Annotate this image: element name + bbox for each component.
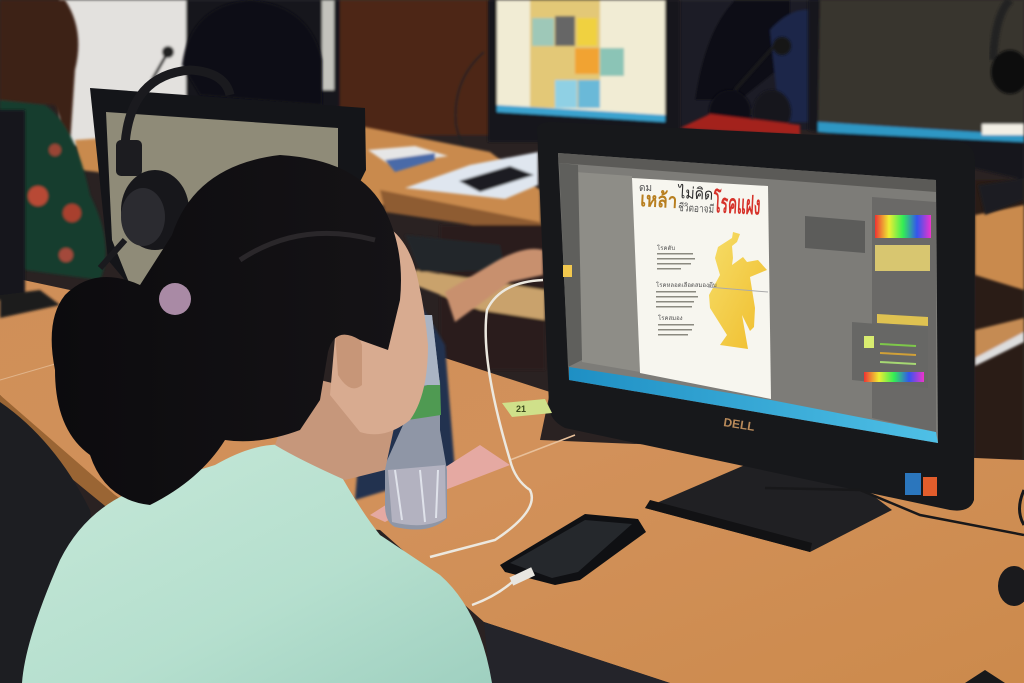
rear person center bbox=[182, 0, 543, 500]
main monitor bbox=[537, 122, 975, 552]
monitor stand bbox=[645, 465, 892, 552]
cables bbox=[430, 280, 1024, 605]
sticker bbox=[923, 477, 937, 496]
rear person left bbox=[0, 0, 106, 280]
pink notebook bbox=[370, 445, 510, 522]
monitor bezel bbox=[537, 122, 975, 511]
main person bbox=[22, 155, 492, 683]
table number tag: 21 bbox=[516, 404, 526, 414]
front desk bbox=[0, 275, 1024, 683]
smartphone bbox=[500, 514, 646, 586]
corner object bottom right bbox=[965, 670, 1005, 683]
rear desks bbox=[75, 125, 1024, 370]
screen: ชีวิตอาจมี bbox=[678, 201, 714, 216]
poster body text: โรคตับ bbox=[657, 244, 675, 252]
face bbox=[330, 225, 428, 434]
poster body text: โรคหลอดเลือดสมองตีบ bbox=[656, 281, 717, 289]
dell logo: DELL bbox=[723, 415, 756, 434]
flyaway hair highlight bbox=[240, 233, 375, 260]
poster body text: โรคสมอง bbox=[658, 314, 683, 322]
screen: เหล้า bbox=[640, 188, 678, 213]
ear bbox=[335, 329, 362, 388]
neck bbox=[275, 375, 400, 480]
screen: ดม bbox=[639, 183, 652, 194]
bear silhouette bbox=[709, 232, 767, 349]
rear monitor center top bbox=[488, 0, 680, 142]
poster title: โรคแฝง bbox=[712, 187, 761, 220]
intel sticker bbox=[905, 473, 921, 495]
device on right edge bbox=[998, 566, 1024, 606]
chair bbox=[0, 402, 92, 683]
screen: ไม่คิด bbox=[676, 183, 714, 204]
left edge monitor bbox=[0, 110, 60, 318]
scrunchie bbox=[159, 283, 191, 315]
headset on left monitor bbox=[100, 70, 230, 268]
keyboard bottom bbox=[484, 622, 670, 683]
rear monitor top right bbox=[808, 0, 1024, 215]
hair bbox=[52, 155, 401, 505]
headset on rear desk bbox=[680, 37, 800, 135]
headset top right bbox=[991, 0, 1024, 94]
water bottle bbox=[385, 315, 447, 530]
monitor left, back-to-front bbox=[90, 88, 366, 300]
table number tag bbox=[502, 399, 552, 417]
shirt bbox=[22, 445, 492, 683]
screen bbox=[558, 153, 938, 443]
papers and phone on rear desk bbox=[368, 146, 538, 199]
poster body text bbox=[656, 244, 717, 336]
